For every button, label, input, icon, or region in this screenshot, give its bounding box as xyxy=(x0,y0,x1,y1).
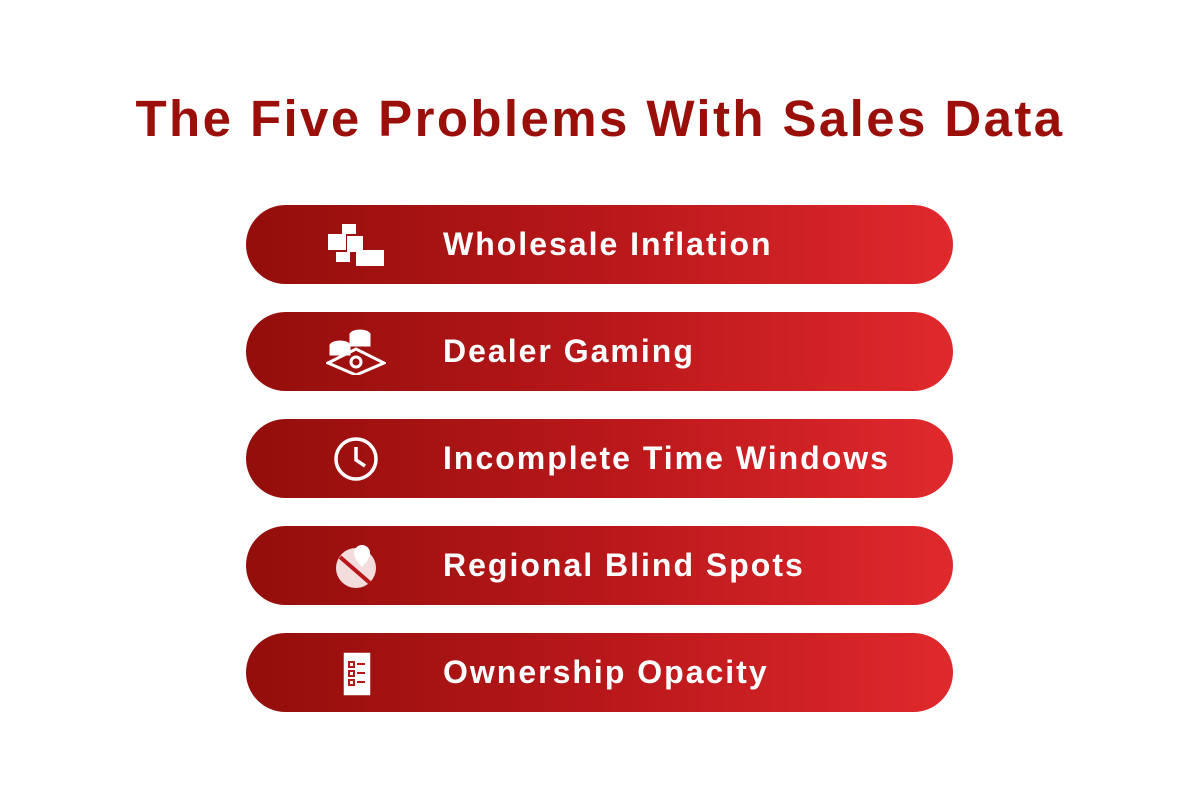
label: Ownership Opacity xyxy=(443,654,769,690)
title: The Five Problems With Sales Data xyxy=(136,90,1064,147)
bar: Regional Blind Spots xyxy=(246,526,953,605)
icon: checklist document xyxy=(344,652,370,696)
bar: Wholesale Inflation xyxy=(246,205,953,284)
icon: money and coins xyxy=(326,330,386,375)
bar: Ownership Opacity xyxy=(246,633,953,712)
icon: clock xyxy=(334,437,378,481)
icon: map pin xyxy=(336,545,376,588)
label: Wholesale Inflation xyxy=(443,226,773,262)
bar: Dealer Gaming xyxy=(246,312,953,391)
label: Incomplete Time Windows xyxy=(443,440,890,476)
bar: Incomplete Time Windows xyxy=(246,419,953,498)
icon: boxes xyxy=(328,224,384,266)
label: Regional Blind Spots xyxy=(443,547,805,583)
label: Dealer Gaming xyxy=(443,333,695,369)
